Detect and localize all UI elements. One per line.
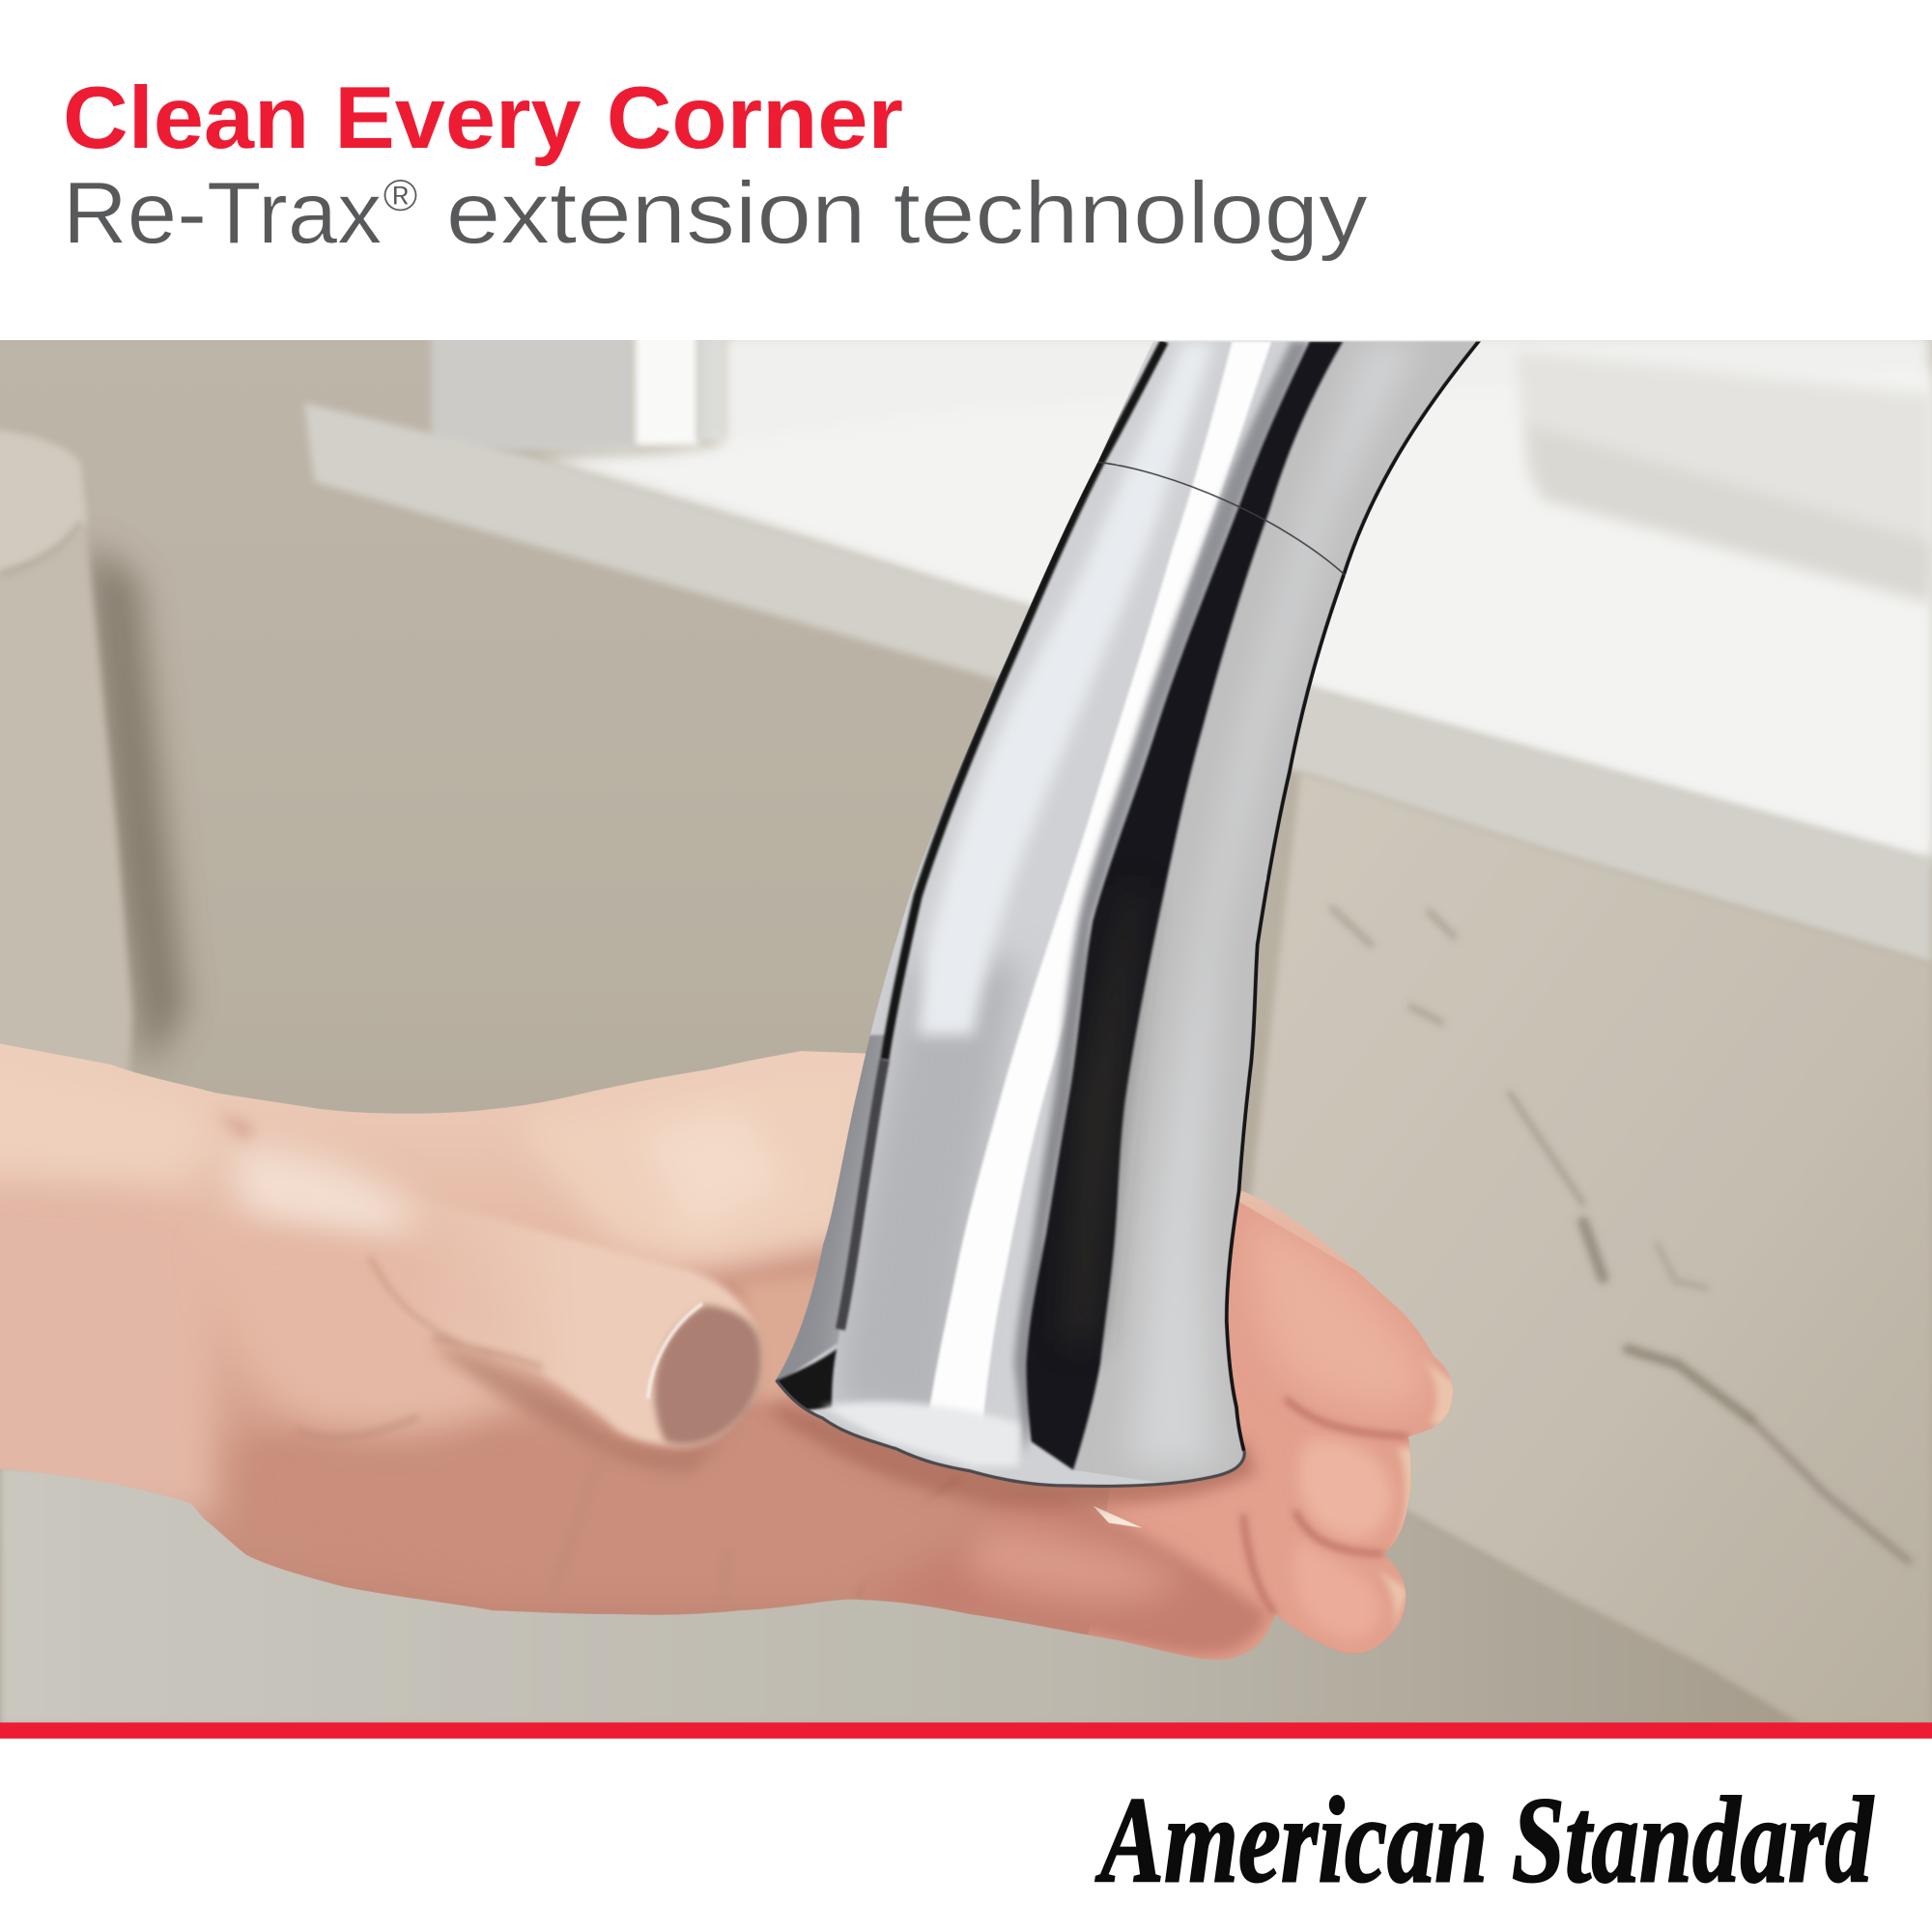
- red divider bar: [0, 1722, 1932, 1739]
- shelf top surface: [543, 369, 1932, 859]
- inner grey lower: [833, 961, 1023, 1430]
- right body: [1073, 332, 1503, 1497]
- hand: [0, 1035, 1479, 1663]
- photo: hand under faucet: [0, 332, 1932, 1725]
- shadow below thumb: [438, 1347, 709, 1472]
- items on shelf: [431, 332, 634, 451]
- mound of thumb: [210, 1233, 542, 1434]
- pinky side palm: [908, 1498, 1269, 1660]
- shadow under faucet: [764, 1405, 1257, 1506]
- subheading: Re-Trax extension technology: extension technology: [446, 164, 1369, 262]
- arm shading: [0, 1316, 224, 1522]
- palm below thumb: [234, 1244, 1010, 1602]
- chrome faucet spout: [739, 332, 1503, 1503]
- back wall shadow by canister: [86, 542, 185, 1072]
- blurred kitchen background: [0, 332, 1932, 1725]
- canister: [0, 531, 134, 1070]
- fingers: [1089, 1202, 1451, 1660]
- base left reflection: [775, 1350, 837, 1410]
- marble veins: [1332, 908, 1909, 1561]
- web of thumb / upper palm: [543, 1109, 850, 1273]
- thumb: [442, 1218, 765, 1451]
- marble counter: [1233, 773, 1932, 1725]
- heading: Clean Every Corner: Clean Every Corner: [63, 70, 903, 167]
- skin creases: [303, 1257, 545, 1439]
- left outer grey: [764, 1035, 887, 1392]
- white highlight band: [925, 341, 1271, 1454]
- blue-white streak panel upper: [918, 341, 1213, 1035]
- right dark edge: [1229, 341, 1481, 1450]
- lower basin: [0, 1468, 1571, 1723]
- thumb nail: [654, 1305, 762, 1445]
- base white lens: [822, 1402, 1019, 1466]
- glare on back of hand: [232, 1146, 425, 1238]
- bottom rim: [775, 1381, 1246, 1488]
- seam line: [1097, 462, 1346, 576]
- subheading: Re-Trax extension technology: Re-Trax: [63, 164, 382, 262]
- subheading: Re-Trax extension technology: ®: [384, 170, 418, 220]
- main dark band: [1026, 341, 1343, 1470]
- left dark stripe: [885, 341, 1164, 1060]
- header background: [0, 0, 1932, 340]
- grey stripe beside dark band: [1014, 341, 1310, 1454]
- shelf front face: [304, 403, 1932, 963]
- subheading: Re-Trax extension technology: [63, 164, 1369, 262]
